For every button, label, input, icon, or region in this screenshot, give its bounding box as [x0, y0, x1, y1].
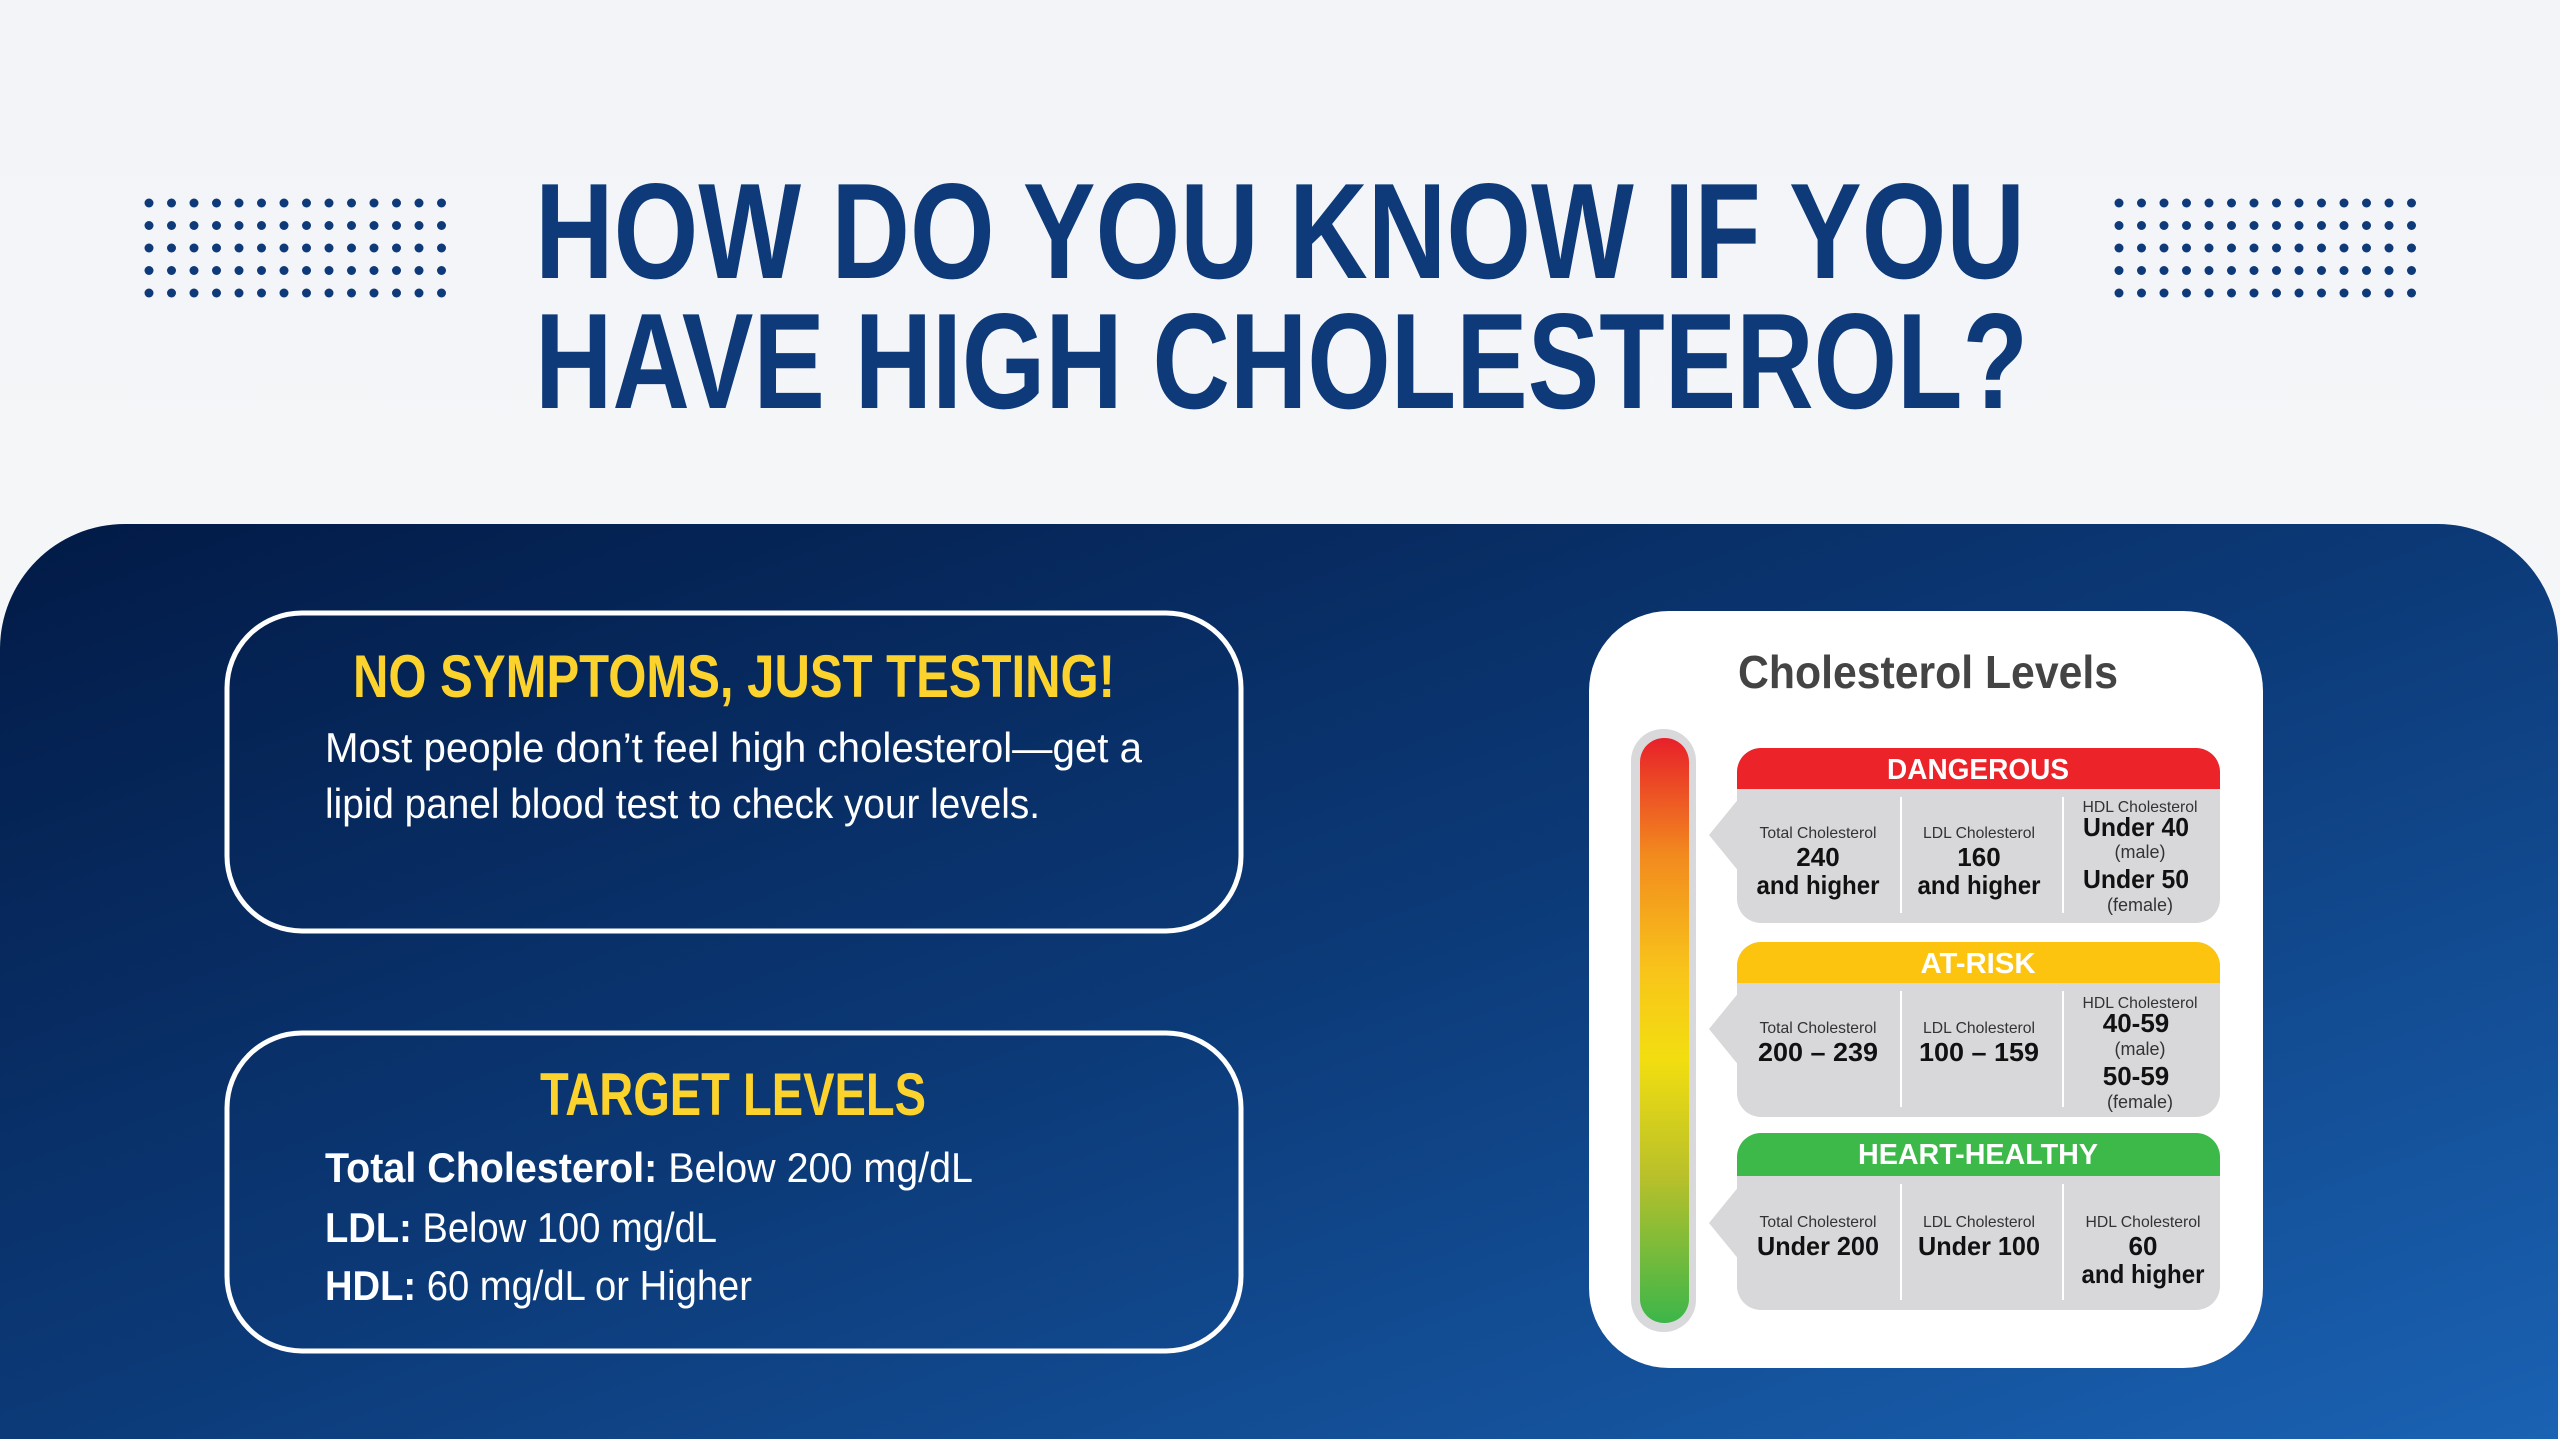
- thermometer bar: [1631, 729, 1696, 1332]
- band: at-risk: AT-RISK: [1920, 948, 2036, 980]
- band: at-risk: (female): [2107, 1092, 2173, 1112]
- dot pattern left: [144, 198, 454, 306]
- target list: Total Cholesterol: Below 200 mg/dL: [325, 1144, 973, 1191]
- band: heart-healthy: [1709, 1133, 2220, 1310]
- band: heart-healthy: and higher: [2082, 1259, 2204, 1289]
- panel: target levels: [227, 1033, 1241, 1351]
- band: dangerous: Total Cholesterol: [1760, 825, 1876, 842]
- panel: no symptoms: [227, 613, 1241, 931]
- band: dangerous: [1709, 748, 2220, 923]
- target list: LDL: Below 100 mg/dL: [325, 1204, 717, 1251]
- band: heart-healthy: Under 100: [1918, 1231, 2040, 1261]
- band: heart-healthy: 60: [2129, 1231, 2157, 1261]
- band: dangerous: and higher: [1918, 870, 2040, 900]
- heading: no symptoms: NO SYMPTOMS, JUST TESTING!: [353, 643, 1115, 710]
- band: dangerous: (female): [2107, 895, 2173, 915]
- target list: HDL: 60 mg/dL or Higher: [325, 1262, 752, 1309]
- band: at-risk: Total Cholesterol: [1760, 1020, 1876, 1037]
- band: dangerous: HDL Cholesterol: [2082, 799, 2198, 816]
- band: at-risk: (male): [2114, 1039, 2166, 1059]
- band: dangerous: 240: [1796, 842, 1840, 872]
- band: dangerous: 160: [1957, 842, 2001, 872]
- heading: target levels: TARGET LEVELS: [540, 1061, 926, 1128]
- band: dangerous: DANGEROUS: [1887, 754, 2069, 786]
- band: at-risk: 200 – 239: [1758, 1037, 1878, 1067]
- band: at-risk: 50-59: [2103, 1061, 2169, 1091]
- band: heart-healthy: HDL Cholesterol: [2086, 1214, 2200, 1231]
- body text: Most people don’t feel high cholesterol—get a: [325, 724, 1143, 771]
- band: dangerous: LDL Cholesterol: [1923, 825, 2035, 842]
- title: [535, 155, 2028, 437]
- band: at-risk: HDL Cholesterol: [2082, 995, 2198, 1012]
- band: at-risk: 40-59: [2103, 1008, 2169, 1038]
- title: HAVE HIGH CHOLESTEROL?: [535, 285, 2028, 437]
- band: heart-healthy: HEART-HEALTHY: [1858, 1139, 2098, 1171]
- band: at-risk: 100 – 159: [1919, 1037, 2039, 1067]
- panel: cholesterol levels chart: [1589, 611, 2263, 1368]
- band: dangerous: Under 50: [2083, 864, 2189, 894]
- chart title: Cholesterol Levels: [1738, 646, 2118, 698]
- band: dangerous: Under 40: [2083, 812, 2189, 842]
- band: at-risk: LDL Cholesterol: [1923, 1020, 2035, 1037]
- body text: lipid panel blood test to check your levels.: [325, 780, 1040, 827]
- dot pattern right: [2114, 198, 2424, 306]
- blue panel: [0, 524, 2558, 1439]
- band: heart-healthy: Under 200: [1757, 1231, 1879, 1261]
- band: dangerous: (male): [2114, 842, 2166, 862]
- body text: [325, 724, 1143, 827]
- band: heart-healthy: Total Cholesterol: [1760, 1214, 1876, 1231]
- target list: [325, 1144, 973, 1309]
- band: dangerous: and higher: [1756, 870, 1880, 900]
- title: HOW DO YOU KNOW IF YOU: [535, 155, 2025, 307]
- band: heart-healthy: LDL Cholesterol: [1923, 1214, 2035, 1231]
- band: at-risk: [1709, 942, 2220, 1117]
